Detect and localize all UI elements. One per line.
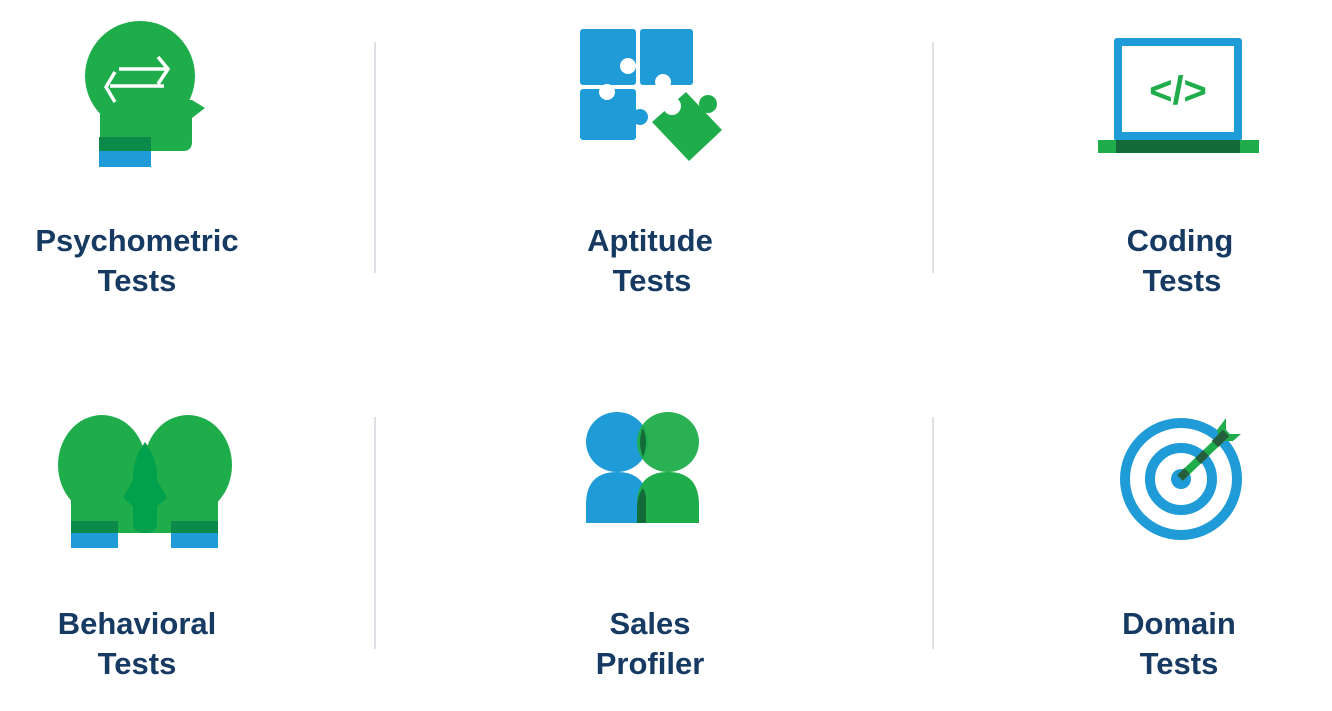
label: psychometric <box>35 223 239 298</box>
icon: laptop code <box>1098 38 1259 153</box>
label: behavioral: Tests <box>98 646 176 681</box>
label: psychometric: Psychometric <box>35 223 239 258</box>
label: coding: Coding <box>1127 223 1233 258</box>
icon: laptop code: </> <box>1149 69 1207 113</box>
label: sales <box>596 606 704 681</box>
label: aptitude: Aptitude <box>587 223 713 258</box>
label: psychometric: Tests <box>98 263 176 298</box>
label: domain <box>1122 606 1236 681</box>
icon: sales people <box>586 412 699 523</box>
label: behavioral: Behavioral <box>58 606 216 641</box>
icon: behavioral heads <box>58 415 232 548</box>
label: domain: Domain <box>1122 606 1236 641</box>
icon: puzzle <box>580 29 722 161</box>
label: coding <box>1127 223 1233 298</box>
label: behavioral <box>58 606 216 681</box>
icon: psychometric head <box>85 21 205 167</box>
label: domain: Tests <box>1140 646 1218 681</box>
label: aptitude <box>587 223 713 298</box>
label: aptitude: Tests <box>613 263 691 298</box>
label: sales: Sales <box>609 606 691 641</box>
label: coding: Tests <box>1143 263 1221 298</box>
icon: target <box>1125 418 1241 535</box>
label: sales: Profiler <box>596 646 704 681</box>
